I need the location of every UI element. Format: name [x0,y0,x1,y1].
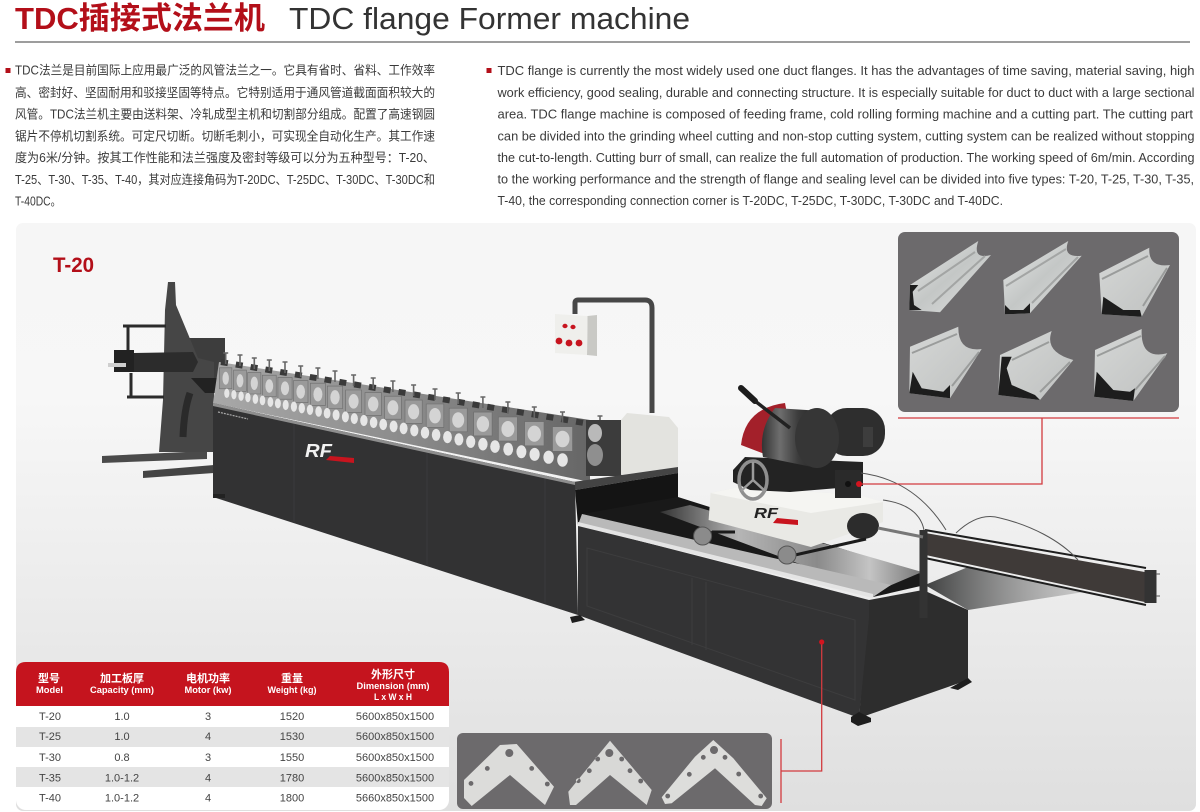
header labels: Weight (kg) [268,685,316,696]
white base [709,487,883,547]
header labels: 外形尺寸 [371,667,415,681]
header labels: L x W x H [374,692,412,703]
table rows: 1.0 [114,711,130,723]
white cover [621,413,678,475]
English description: work efficiency, good sealing, durable and connecting structure. It is especially suitable for duct to duct with a large sectional [497,85,1195,100]
callout: flange profiles panel [898,232,1179,412]
bracket 2 [568,741,652,805]
header labels: 加工板厚 [100,671,144,685]
brand logo: RF [754,505,779,522]
beam arm [920,530,1160,618]
English description: to the working performance and the strength of flange and sealing level can be divided into five types: T-20, T-25, T-30, T-35, [498,172,1194,186]
profile 5 [998,331,1073,400]
table header [16,662,449,706]
lower roller discs [224,389,568,467]
bracket 3 [662,740,767,806]
table rows: 5600x850x1500 [356,772,434,784]
cables [861,473,1078,560]
table rows: 4 [205,792,211,804]
table rows: 3 [205,711,211,723]
callout line: corner brackets [781,639,824,803]
table rows: 4 [205,731,211,743]
header labels: Dimension (mm) [356,681,430,692]
table rows: 5660x850x1500 [356,792,434,804]
profile 2 [1003,241,1082,314]
callout: corner brackets panel [457,733,772,809]
drive rollers and housing [586,420,622,476]
Chinese description [6,62,435,208]
table rows: 5600x850x1500 [356,731,434,743]
header labels: Motor (kw) [184,685,232,696]
English description: can be divided into the grinding wheel cutting and non-stop cutting system, cutting system can be realized without stopping [498,128,1194,144]
table rows: T-25 [39,731,61,743]
table rows: T-35 [39,772,61,784]
table body [16,662,449,810]
hand wheel [739,461,767,499]
table rows: 4 [205,772,211,784]
header labels: 型号 [38,672,60,685]
header labels [36,667,430,703]
English description: T-40, the corresponding connection corner is T-20DC, T-25DC, T-30DC, T-30DC and T-40DC. [498,193,1003,208]
motor [825,408,885,456]
control panel with pole [555,300,652,413]
brand logo [305,441,354,463]
table rows: 1530 [280,731,304,743]
table rows: T-30 [39,752,61,764]
header labels: Capacity (mm) [90,685,154,696]
profile 4 [909,327,982,398]
title [15,1,690,36]
large roller discs [222,372,570,447]
body front [213,403,578,615]
table rows [39,711,434,804]
brand logo [754,505,798,525]
red blade guard [741,403,790,456]
table rows: 1550 [280,752,304,764]
roller side panel [213,362,590,482]
Chinese description: T-40DC。 [15,194,61,208]
Chinese description: 锯片不停机切割系统。可定尺切断。切断毛刺小，可实现全自动化生产。其工作速 [15,128,435,144]
profile 6 [1094,329,1167,401]
English description: the cut-to-length. Cutting burr of small, can realize the full automation of production. The working speed of 6m/min. According [498,150,1194,165]
table rows: 3 [205,752,211,764]
beam shadow [925,567,1084,610]
machine illustration: cutting table and beam [570,497,1084,726]
table rows: T-20 [39,711,61,723]
profile 3 [1099,248,1170,317]
English title: TDC flange Former machine [289,1,690,36]
specification table [16,662,449,810]
bracket 1 [464,744,554,806]
table front [578,525,869,718]
machine illustration: roll forming main unit [213,353,678,615]
header labels: 电机功率 [186,671,230,685]
table rows: 1520 [280,711,304,723]
Chinese description: 度为6米/分钟。按其工作性能和法兰强度及密封等级可以分为五种型号：T-20、 [15,150,435,165]
table rows: T-40 [39,792,61,804]
table rows: 1.0-1.2 [105,792,139,804]
header labels: 重量 [281,671,303,685]
handle [741,388,755,401]
table rows: 5600x850x1500 [356,711,434,723]
gap surface [573,467,678,490]
panel: machine background [16,223,1196,811]
English description: TDC flange is currently the most widely used one duct flanges. It has the advantages of time saving, material saving, high [498,63,1194,78]
table rows: 5600x850x1500 [356,752,434,764]
English description: area. TDC flange machine is composed of feeding frame, cold rolling forming machine and a cutting part. The cutting part [498,106,1193,122]
cylinder and rods [847,513,879,539]
table rows: 1780 [280,772,304,784]
rail [578,514,891,597]
Chinese title: TDC插接式法兰机 [15,1,265,36]
header labels: Model [36,685,63,696]
Chinese description: 风管。TDC法兰机主要由送料架、冷轧成型主机和切割部分组成。配置了高速钢圆 [15,106,435,122]
profile 1 [909,241,991,312]
English description [486,63,1195,208]
model label: T-20 [53,254,94,277]
Chinese description: 高、密封好、坚固耐用和驳接坚固等特点。它特别适用于通风管道截面面积较大的 [15,85,435,100]
Chinese description: T-25、T-30、T-35、T-40，其对应连接角码为T-20DC、T-25DC、T-30DC、T-30DC和 [15,172,435,187]
table rows: 0.8 [114,752,130,764]
table rows: 1.0 [114,731,130,743]
clamp mechanism [733,457,863,492]
cutting unit [694,388,1078,564]
callout line: flange profiles [856,418,1179,487]
machine illustration: decoiler [102,282,225,478]
Chinese description: TDC法兰是目前国际上应用最广泛的风管法兰之一。它具有省时、省料、工作效率 [15,62,435,78]
brand logo: RF [305,441,333,461]
table side [859,590,968,718]
table rows: 1.0-1.2 [105,772,139,784]
table rows: 1800 [280,792,304,804]
table top [582,497,925,597]
feet [851,712,871,726]
